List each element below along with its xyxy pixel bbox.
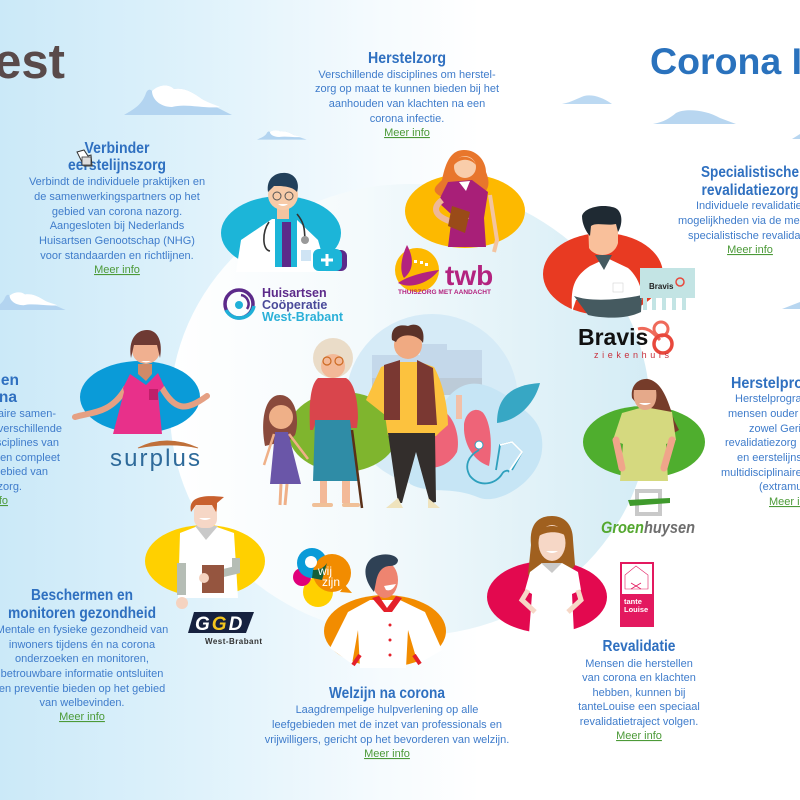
man bbox=[366, 325, 448, 508]
panel: Verbinder eerstelijnszorg: eerstelijnszorg bbox=[68, 157, 166, 174]
lower right blob bbox=[408, 384, 542, 499]
cloud: left edge bbox=[0, 292, 66, 310]
panel: Beschermen en monitoren gezondheid: en preventie bieden op het gebied bbox=[0, 683, 165, 695]
cloud: top right small bbox=[562, 95, 612, 104]
figure: home care nurse bbox=[405, 150, 525, 252]
panel: Revalidatie: Meer info bbox=[616, 730, 662, 742]
logo: Bravis ziekenhuis: Bravis bbox=[578, 324, 648, 350]
logo: twb: THUISZORG MET AANDACHT bbox=[398, 289, 491, 296]
building bbox=[372, 344, 482, 395]
panel: Welzijn na corona: Welzijn na corona bbox=[329, 685, 445, 702]
panel: Verbonden na corona bbox=[0, 372, 62, 507]
lungs bbox=[432, 410, 491, 468]
panel: Herstelzorg: Verschillende disciplines om herstel- bbox=[318, 69, 496, 81]
panel: Beschermen en monitoren gezondheid: monitoren gezondheid bbox=[8, 605, 156, 622]
panel: Beschermen en monitoren gezondheid: onderzoeken en monitoren, bbox=[15, 653, 149, 665]
logo: Bravis ziekenhuis bbox=[578, 322, 672, 360]
panel: Specialistische revalidatiezorg: Meer info bbox=[727, 244, 773, 256]
figure: hospital specialist bbox=[543, 206, 663, 318]
grandma bbox=[310, 338, 362, 508]
panel: Welzijn na corona: Meer info bbox=[364, 748, 410, 760]
logo: tante Louise: Louise bbox=[624, 605, 648, 614]
panel: Welzijn na corona bbox=[265, 685, 509, 760]
cloud: right edge lower bbox=[782, 302, 800, 309]
backdrop blob bbox=[346, 314, 518, 486]
panel: Herstelzorg: corona infectie. bbox=[370, 113, 444, 125]
panel: Beschermen en monitoren gezondheid bbox=[0, 587, 168, 723]
logo: GGD West-Brabant: West-Brabant bbox=[205, 637, 262, 646]
sign: Bravis bbox=[640, 268, 695, 310]
girl bbox=[263, 395, 308, 505]
panel: Welzijn na corona: Laagdrempelige hulpverlening op alle bbox=[296, 704, 478, 716]
logo: wij zijn bbox=[293, 548, 352, 607]
panel: Beschermen en monitoren gezondheid: Mentale en fysieke gezondheid van bbox=[0, 624, 168, 636]
logo: GGD West-Brabant bbox=[188, 612, 262, 646]
logo: Huisartsen Coöperatie West-Brabant: Huisartsen bbox=[262, 286, 327, 300]
logo: surplus: surplus bbox=[110, 445, 200, 472]
figure: tanteLouise carer bbox=[487, 516, 607, 634]
logo: Huisartsen Coöperatie West-Brabant bbox=[225, 286, 344, 324]
logo: Bravis ziekenhuis: ziekenhuis bbox=[594, 350, 670, 360]
panel: Herstelprogramma: en eerstelijns bbox=[737, 452, 800, 464]
logo: wij zijn: zijn bbox=[322, 575, 340, 589]
figure: Groenhuysen carer bbox=[583, 379, 705, 481]
leaf bbox=[497, 383, 540, 423]
panel: Herstelzorg: Meer info bbox=[384, 127, 430, 139]
logo: Huisartsen Coöperatie West-Brabant: West-Brabant bbox=[262, 310, 344, 324]
icon: hand cursor bbox=[77, 150, 92, 166]
panel: Verbinder eerstelijnszorg: de samenwerkingspartners op het bbox=[34, 191, 200, 203]
panel: Beschermen en monitoren gezondheid: Beschermen en bbox=[31, 587, 133, 604]
figure: doctor bbox=[221, 173, 347, 272]
cloud: right edge top bbox=[792, 134, 800, 139]
cloud: top left bbox=[124, 85, 232, 115]
title right: Corona I bbox=[650, 40, 800, 82]
panel: Revalidatie bbox=[578, 638, 700, 742]
panel: Herstelzorg: Herstelzorg bbox=[368, 50, 446, 67]
panel: Beschermen en monitoren gezondheid: van welbevinden. bbox=[39, 697, 125, 709]
panel: Specialistische revalidatiezorg bbox=[678, 164, 800, 256]
logo: twb: twb bbox=[445, 260, 493, 291]
logo: GGD West-Brabant: GGD bbox=[195, 614, 244, 635]
cloud: small centre bbox=[257, 130, 307, 140]
logo: Groenhuysen: Groenhuysen bbox=[601, 519, 695, 537]
logo: twb bbox=[395, 245, 493, 296]
cloud: top right bbox=[653, 110, 736, 124]
green blob bbox=[288, 392, 398, 472]
central circle bbox=[170, 184, 650, 636]
panel: Verbinder eerstelijnszorg: gebied van corona nazorg. bbox=[52, 206, 182, 218]
logo: tante Louise bbox=[620, 562, 654, 627]
logo: tante Louise: tante bbox=[624, 597, 642, 606]
panel: Welzijn na corona: leefgebieden met de inzet van professionals en bbox=[272, 719, 502, 731]
figure: Surplus carer bbox=[75, 330, 207, 434]
panel: Herstelzorg: aanhouden van klachten na een bbox=[329, 98, 485, 110]
panel: Beschermen en monitoren gezondheid: betrouwbare informatie ontsluiten bbox=[1, 668, 163, 680]
panel: Beschermen en monitoren gezondheid: inwoners tijdens én na corona bbox=[9, 639, 156, 651]
panel: Verbinder eerstelijnszorg: Huisartsen Genootschap (NHG) bbox=[39, 235, 195, 247]
central illustration: family and lungs bbox=[263, 314, 542, 508]
panel: Revalidatie: hebben, kunnen bij bbox=[593, 687, 685, 699]
figure: GGD worker bbox=[145, 496, 265, 609]
panel: Revalidatie: van corona en klachten bbox=[582, 672, 696, 684]
figure: welfare worker bbox=[324, 554, 446, 668]
logo: wij zijn: wij bbox=[317, 564, 332, 578]
panel: Beschermen en monitoren gezondheid: Meer info bbox=[59, 711, 105, 723]
panel: Herstelzorg bbox=[315, 50, 499, 139]
panel: Verbinder eerstelijnszorg: voor standaarden en richtlijnen. bbox=[40, 250, 194, 262]
panel: Verbinder eerstelijnszorg: Verbindt de individuele praktijken en bbox=[29, 176, 205, 188]
logo: Huisartsen Coöperatie West-Brabant: Coöperatie bbox=[262, 298, 327, 312]
panel: Verbinder eerstelijnszorg: Aangesloten bij Nederlands bbox=[50, 220, 185, 232]
panel: Herstelprogramma bbox=[721, 375, 800, 508]
panel: Herstelzorg: zorg op maat te kunnen bieden bij het bbox=[315, 83, 499, 95]
panel: Revalidatie: revalidatietraject volgen. bbox=[580, 716, 698, 728]
panel: Revalidatie: tanteLouise een speciaal bbox=[578, 701, 700, 713]
panel: Welzijn na corona: vrijwilligers, gericht op het bevorderen van welzijn. bbox=[265, 734, 509, 746]
sign: Bravis: Bravis bbox=[649, 282, 674, 291]
stethoscope bbox=[467, 442, 522, 483]
panel: Verbinder eerstelijnszorg bbox=[29, 140, 205, 276]
panel: Verbinder eerstelijnszorg: Verbinder bbox=[84, 140, 150, 157]
panel: Revalidatie: Mensen die herstellen bbox=[585, 658, 693, 670]
panel: Revalidatie: Revalidatie bbox=[602, 638, 676, 655]
panel: Verbinder eerstelijnszorg: Meer info bbox=[94, 264, 140, 276]
logo: Groenhuysen bbox=[601, 491, 695, 537]
